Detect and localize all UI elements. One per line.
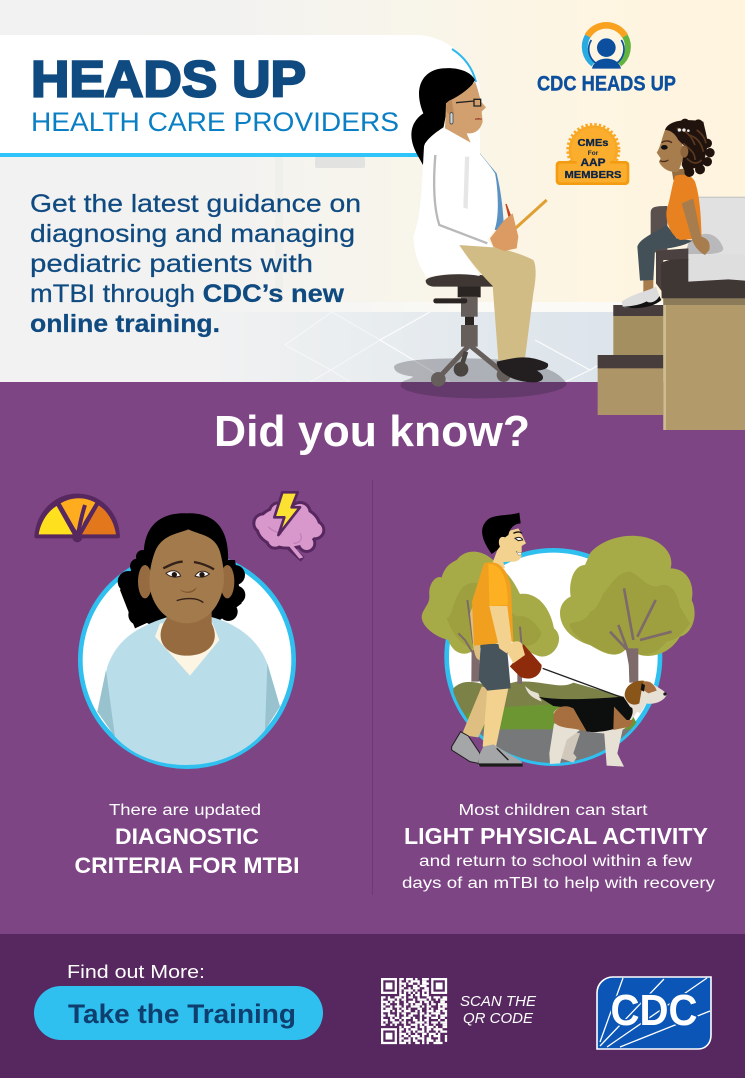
divider [372, 480, 373, 895]
circle background [80, 553, 294, 767]
illustration: boy walking a dog in a park [422, 513, 695, 771]
scan the QR code label: QR CODE [463, 1011, 533, 1027]
illustration: doctor and exam room [394, 68, 745, 430]
caption right: and return to school within a few [419, 853, 693, 870]
caption right [402, 802, 715, 892]
intro text block: Get the latest guidance on [30, 190, 361, 218]
badge: CMEs for AAP members: AAP [580, 157, 606, 169]
dog [525, 681, 667, 767]
intro text block: mTBI through CDC’s new [30, 280, 345, 308]
right tree [560, 536, 695, 683]
CDC logo [597, 977, 711, 1049]
intro text block: online training. [30, 310, 220, 338]
badge: CMEs for AAP members: CMEs [578, 137, 609, 149]
background: clinic wall and floor [0, 0, 745, 382]
park scenery [453, 682, 636, 763]
footer band [0, 934, 745, 1078]
heading: Did you know?: Did you know? [214, 407, 530, 456]
left tree [422, 552, 559, 657]
chair [426, 274, 511, 387]
boy [452, 513, 542, 767]
CDC logo: CDC [610, 986, 698, 1035]
caption left: CRITERIA FOR MTBI [74, 853, 300, 878]
child patient [622, 119, 715, 308]
subtitle: HEALTH CARE PROVIDERS [31, 107, 399, 137]
icon: gauge [36, 496, 118, 542]
trunks [471, 640, 480, 682]
leash [543, 668, 622, 697]
title: HEADS UP: HEADS UP [31, 50, 306, 108]
chair shadow [394, 358, 567, 398]
button: Take the Training [34, 986, 323, 1040]
purple main panel [0, 382, 745, 934]
doctor [411, 68, 548, 382]
footer label: Find out More: [67, 961, 205, 982]
scan the QR code label [460, 994, 536, 1027]
woman [97, 513, 280, 765]
illustration: woman with symptoms [80, 513, 294, 767]
intro text block: pediatric patients with [30, 250, 313, 278]
QR code [381, 979, 447, 1043]
exam table and steps [598, 197, 745, 430]
icon: brain with lightning bolt [255, 492, 322, 559]
circle background [447, 550, 660, 764]
caption right: Most children can start [458, 802, 648, 819]
caption left [74, 802, 300, 878]
caption right: days of an mTBI to help with recovery [402, 875, 715, 892]
header banner [0, 35, 480, 157]
badge: CMEs for AAP members: MEMBERS [564, 169, 622, 181]
caption left: There are updated [109, 802, 261, 819]
button: Take the Training: Take the Training [68, 999, 296, 1029]
scan the QR code label: SCAN THE [460, 994, 536, 1010]
badge: CMEs for AAP members: For [588, 150, 599, 157]
logo: CDC HEADS UP [537, 25, 676, 95]
caption left: DIAGNOSTIC [115, 824, 259, 849]
intro text block [30, 190, 361, 338]
intro text block: diagnosing and managing [30, 220, 355, 248]
logo: CDC HEADS UP: CDC HEADS UP [537, 72, 676, 96]
caption right: LIGHT PHYSICAL ACTIVITY [404, 823, 708, 849]
badge: CMEs for AAP members [556, 125, 629, 185]
